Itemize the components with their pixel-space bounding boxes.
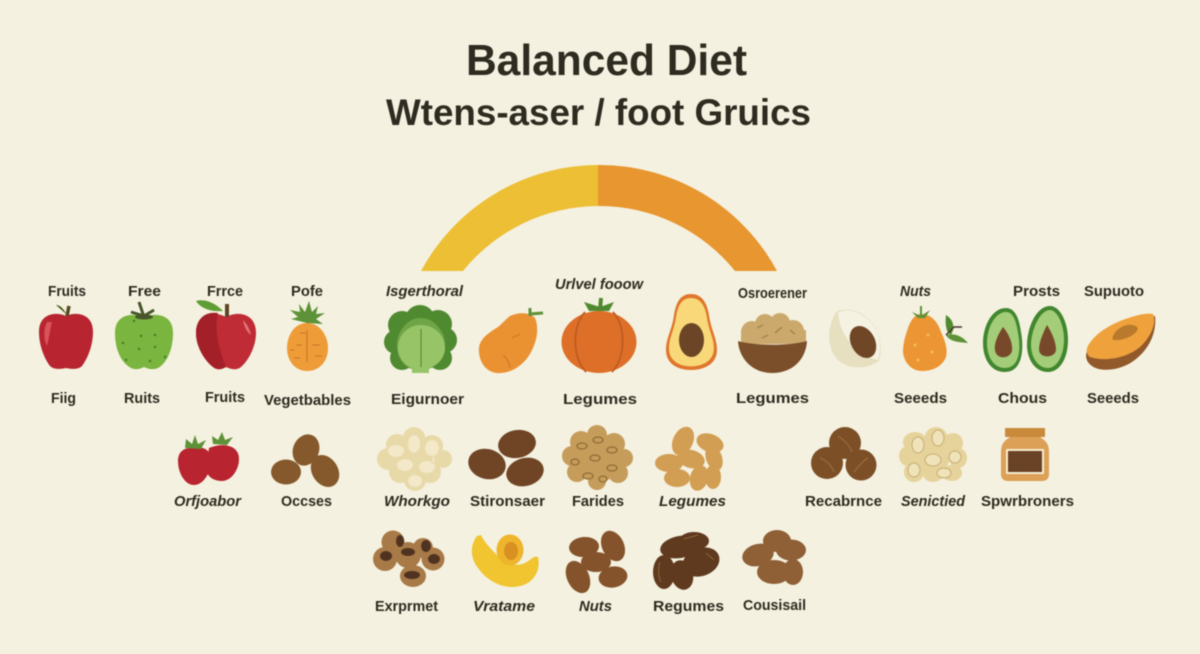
icon: bowl of grains bbox=[738, 313, 807, 373]
icon: dark beans bbox=[653, 532, 724, 592]
label: Spwrbroners: Spwrbroners bbox=[981, 493, 1074, 510]
icon: three brown nuts bbox=[271, 430, 345, 492]
label: Legumes: Legumes bbox=[563, 391, 637, 408]
label: Pofe: Pofe bbox=[291, 283, 323, 300]
icon: pale seeds pile bbox=[377, 427, 452, 491]
label: Ruits: Ruits bbox=[124, 390, 160, 407]
icon: papaya half bbox=[1086, 314, 1155, 370]
icon: two avocado halves bbox=[983, 306, 1068, 372]
label: Chous: Chous bbox=[998, 390, 1047, 407]
icon: brown almonds bbox=[561, 527, 630, 597]
icon: avocado half, orange rim bbox=[666, 294, 717, 370]
label: Fruits: Fruits bbox=[205, 389, 245, 406]
icon: red apple with leaf bbox=[196, 300, 256, 369]
label: Legumes: Legumes bbox=[659, 493, 726, 510]
icon: cabbage bbox=[384, 305, 457, 373]
label: Fruits: Fruits bbox=[48, 283, 86, 300]
icon: peanut butter jar bbox=[1001, 428, 1049, 481]
icon: three dark seeds bbox=[465, 427, 547, 490]
label: Supuoto: Supuoto bbox=[1084, 283, 1144, 300]
label: Vratame: Vratame bbox=[473, 598, 535, 615]
icon: banana and apricot half bbox=[472, 534, 539, 587]
icon: three walnuts bbox=[811, 427, 876, 480]
icon: two strawberries bbox=[178, 432, 239, 485]
label: Exrprmet: Exrprmet bbox=[375, 598, 438, 615]
label: Farides: Farides bbox=[572, 493, 624, 510]
icon: white nut with brown seed bbox=[829, 310, 882, 367]
icon: red apple bbox=[39, 305, 93, 369]
label: Cousisail: Cousisail bbox=[743, 597, 806, 614]
subtitle: Wtens-aser / foot Gruics bbox=[386, 92, 811, 133]
label: Nuts: Nuts bbox=[579, 598, 612, 615]
semicircular arc gauge bbox=[421, 165, 777, 271]
label: Seeeds: Seeeds bbox=[1087, 390, 1139, 407]
icon: pumpkin bbox=[562, 298, 636, 373]
label: Senictied: Senictied bbox=[901, 493, 966, 510]
label: Prosts: Prosts bbox=[1013, 283, 1060, 300]
label: Fiig: Fiig bbox=[51, 390, 76, 407]
label: Seeeds: Seeeds bbox=[894, 390, 947, 407]
icon: orange squash bbox=[479, 308, 543, 373]
label: Frrce: Frrce bbox=[207, 283, 243, 300]
label: Occses: Occses bbox=[281, 493, 332, 510]
label: Recabrnce: Recabrnce bbox=[805, 493, 882, 510]
icon: tan lentil pile bbox=[562, 425, 633, 490]
label: Legumes: Legumes bbox=[736, 390, 809, 407]
label: Whorkgo: Whorkgo bbox=[384, 493, 450, 510]
icon: patterned nuts bbox=[373, 530, 444, 587]
icon: green apple bbox=[115, 302, 173, 369]
label: Eigurnoer: Eigurnoer bbox=[391, 391, 464, 408]
icon: tan beans bbox=[655, 423, 726, 493]
title: Balanced Diet bbox=[466, 36, 747, 85]
label: Free: Free bbox=[128, 283, 161, 300]
label: Nuts: Nuts bbox=[900, 283, 931, 300]
label: Isgerthoral: Isgerthoral bbox=[386, 283, 464, 300]
icon: orange textured fruit with leaves bbox=[903, 306, 968, 371]
icon: pineapple bbox=[287, 301, 328, 371]
label: Vegetbables: Vegetbables bbox=[264, 392, 351, 409]
icon: cashews bbox=[740, 530, 806, 585]
label: Stironsaer: Stironsaer bbox=[470, 493, 545, 510]
icon: pale oat pile bbox=[899, 427, 967, 482]
label: Orfjoabor: Orfjoabor bbox=[174, 493, 242, 510]
label: Urlvel fooow: Urlvel fooow bbox=[555, 276, 644, 293]
label: Regumes: Regumes bbox=[653, 598, 724, 615]
label: Osroerener: Osroerener bbox=[738, 285, 807, 302]
